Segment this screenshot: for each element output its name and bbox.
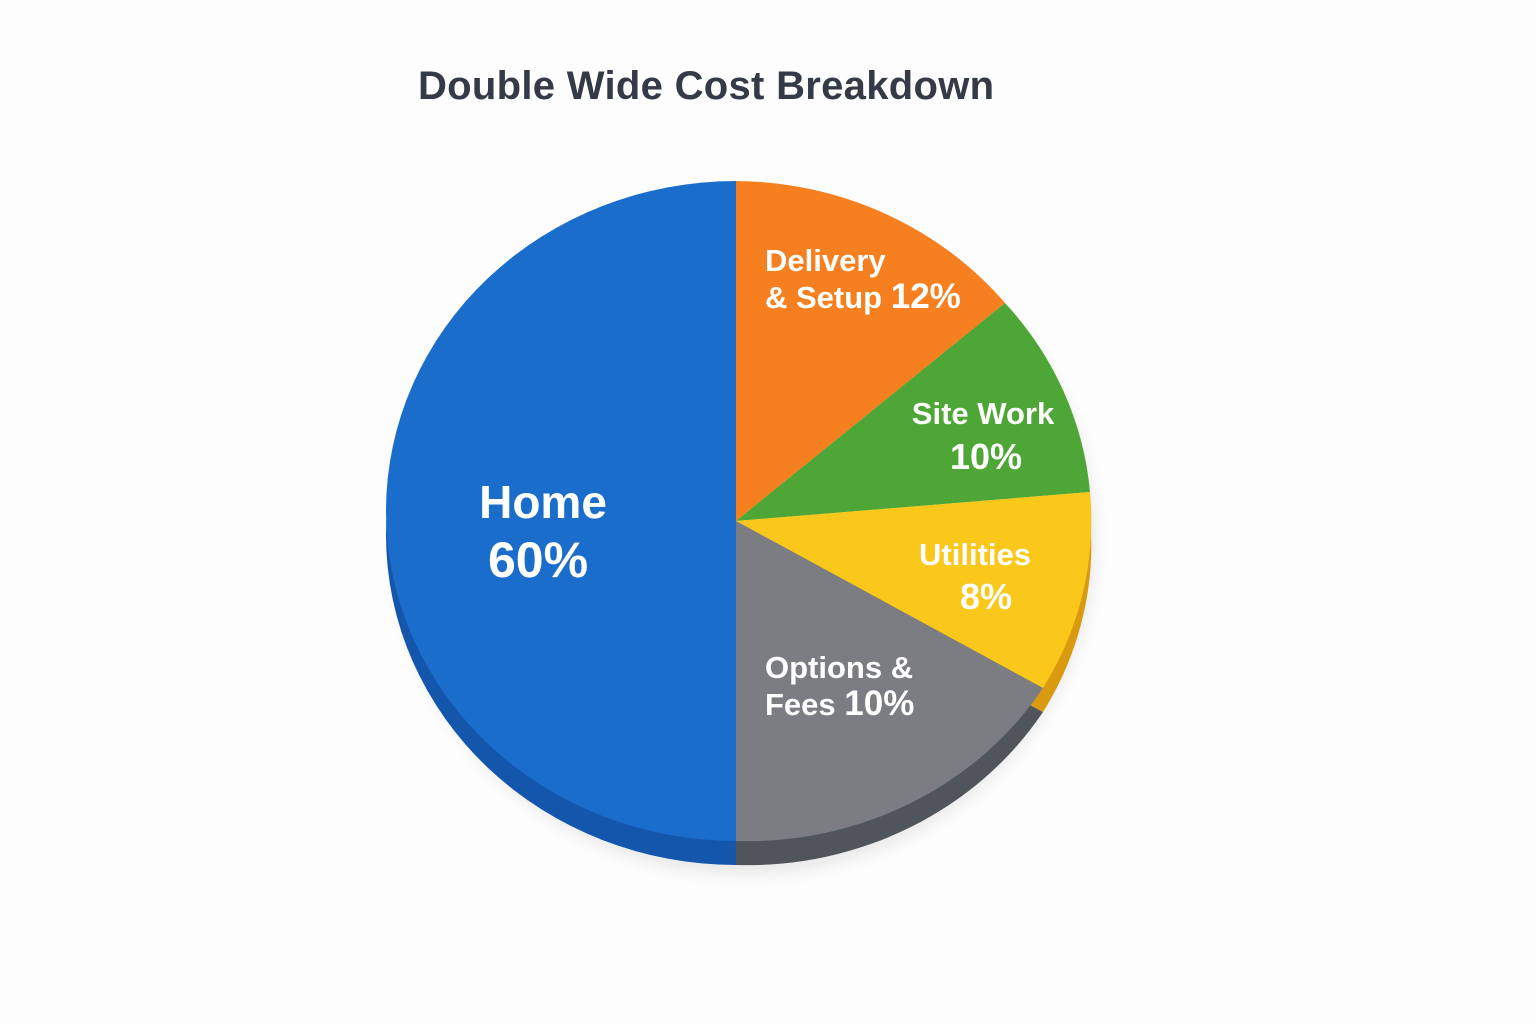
slice: utilities xyxy=(736,492,1091,688)
slice: utilities: 8% xyxy=(960,576,1012,617)
slice: site work xyxy=(736,303,1090,521)
slice: delivery & setup: & Setup 12% xyxy=(765,277,961,316)
slice: options & fees: Fees 10% xyxy=(765,684,914,723)
depth layer xyxy=(386,205,1091,865)
slice: delivery & setup xyxy=(736,181,1005,521)
slice: home: Home xyxy=(479,476,607,528)
slice: site work: 10% xyxy=(950,436,1022,477)
slice: home: 60% xyxy=(488,532,588,588)
slice: delivery & setup: Delivery xyxy=(765,243,886,278)
slice: utilities: Utilities xyxy=(919,537,1031,572)
slice: site work: Site Work xyxy=(912,396,1055,431)
title: Double Wide Cost Breakdown xyxy=(418,64,994,108)
slice: options & fees xyxy=(736,521,1043,841)
slice: options & fees: Options & xyxy=(765,650,913,685)
slice: home xyxy=(386,181,736,841)
shadow xyxy=(395,205,1095,875)
